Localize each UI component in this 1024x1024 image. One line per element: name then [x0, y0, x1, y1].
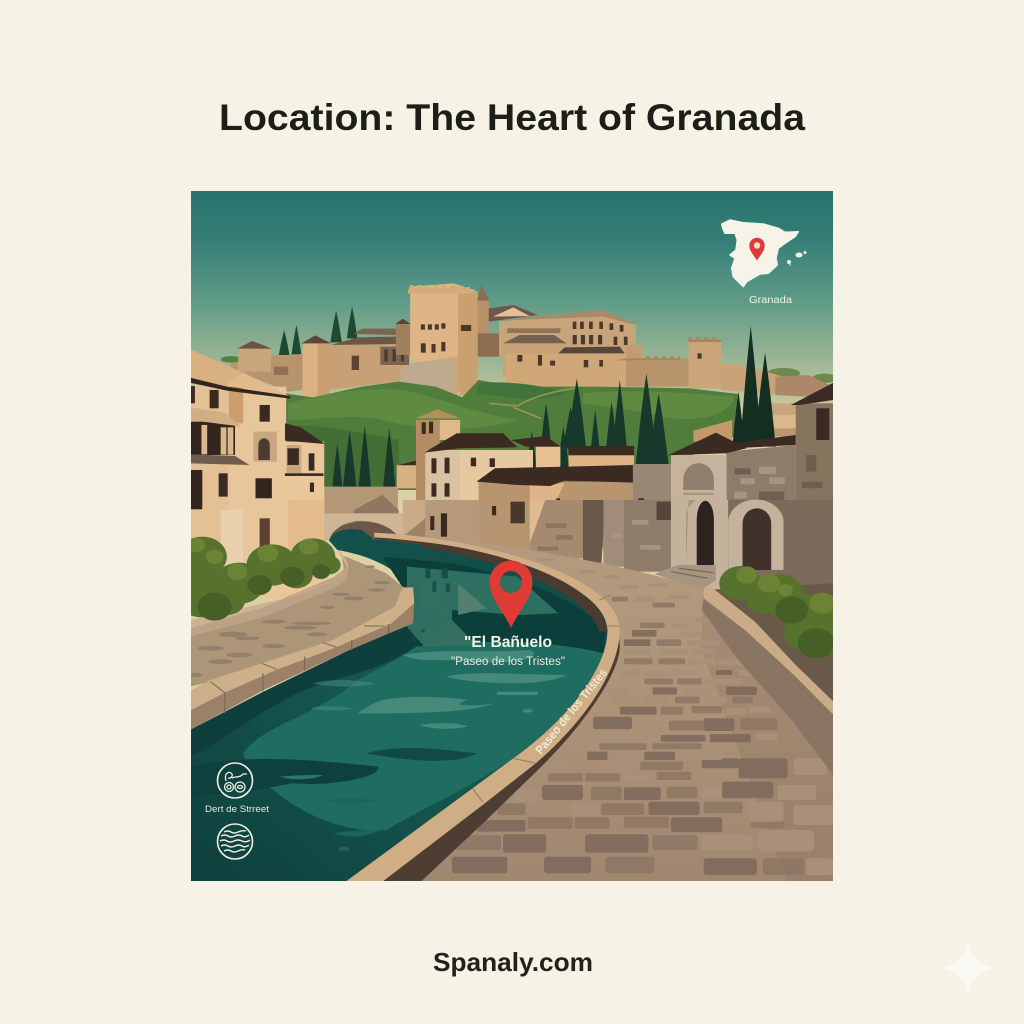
location label: El Bañuelo: "El Bañuelo [464, 634, 552, 651]
panel: Granada illustration [173, 191, 858, 883]
icon label: Dert de Street: Dert de Strreet [205, 804, 269, 815]
title: Location: The Heart of Granada [219, 97, 805, 138]
sparkle mark [944, 944, 992, 992]
icon: water waves in circle [218, 824, 252, 859]
curved street name on curb: Paseo de los Tristes [532, 665, 610, 757]
left bushes [191, 536, 341, 621]
stone gatehouse and wall [668, 383, 833, 607]
green hillside [285, 380, 738, 490]
small map of Spain [722, 220, 806, 306]
icon: bicycle in circle [218, 763, 252, 798]
map label: Granada: Granada [749, 294, 792, 306]
right wall with bushes [702, 566, 833, 774]
cobbled street [346, 533, 834, 883]
left foreground building [190, 349, 325, 598]
river curb on the right [343, 533, 620, 883]
footer: website: Spanaly.com [433, 947, 593, 977]
river water [190, 529, 607, 883]
lower street level: bridge and waterfront walls [220, 500, 833, 631]
large location pin [490, 560, 532, 628]
right foreground cypresses [732, 326, 776, 447]
Alhambra fortress on the hill [221, 283, 837, 398]
left promenade and curb [188, 549, 414, 730]
small map pin [749, 238, 765, 260]
midground houses and stone walls [324, 403, 798, 551]
location sub-label: Paseo de los Tristes: "Paseo de los Tristes" [451, 656, 565, 668]
cypress trees [332, 373, 668, 487]
